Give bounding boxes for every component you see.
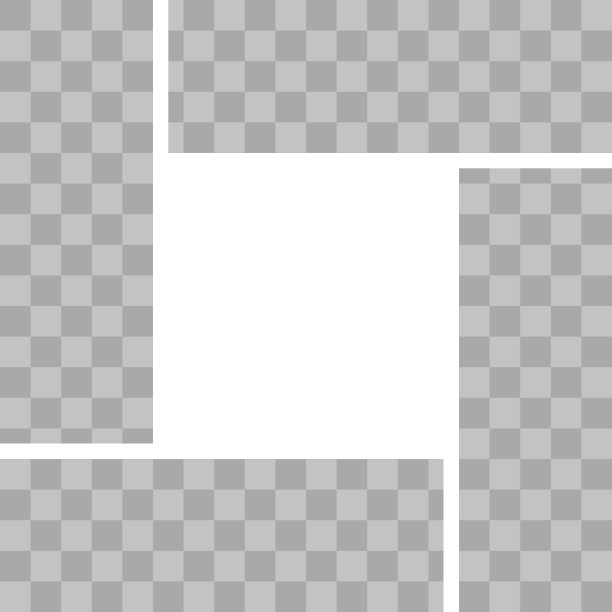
- panel: bottom checkerboard: [0, 459, 444, 612]
- panel: top checkerboard: [168, 0, 612, 153]
- panel: right checkerboard: [459, 168, 612, 612]
- panel: left checkerboard: [0, 0, 153, 444]
